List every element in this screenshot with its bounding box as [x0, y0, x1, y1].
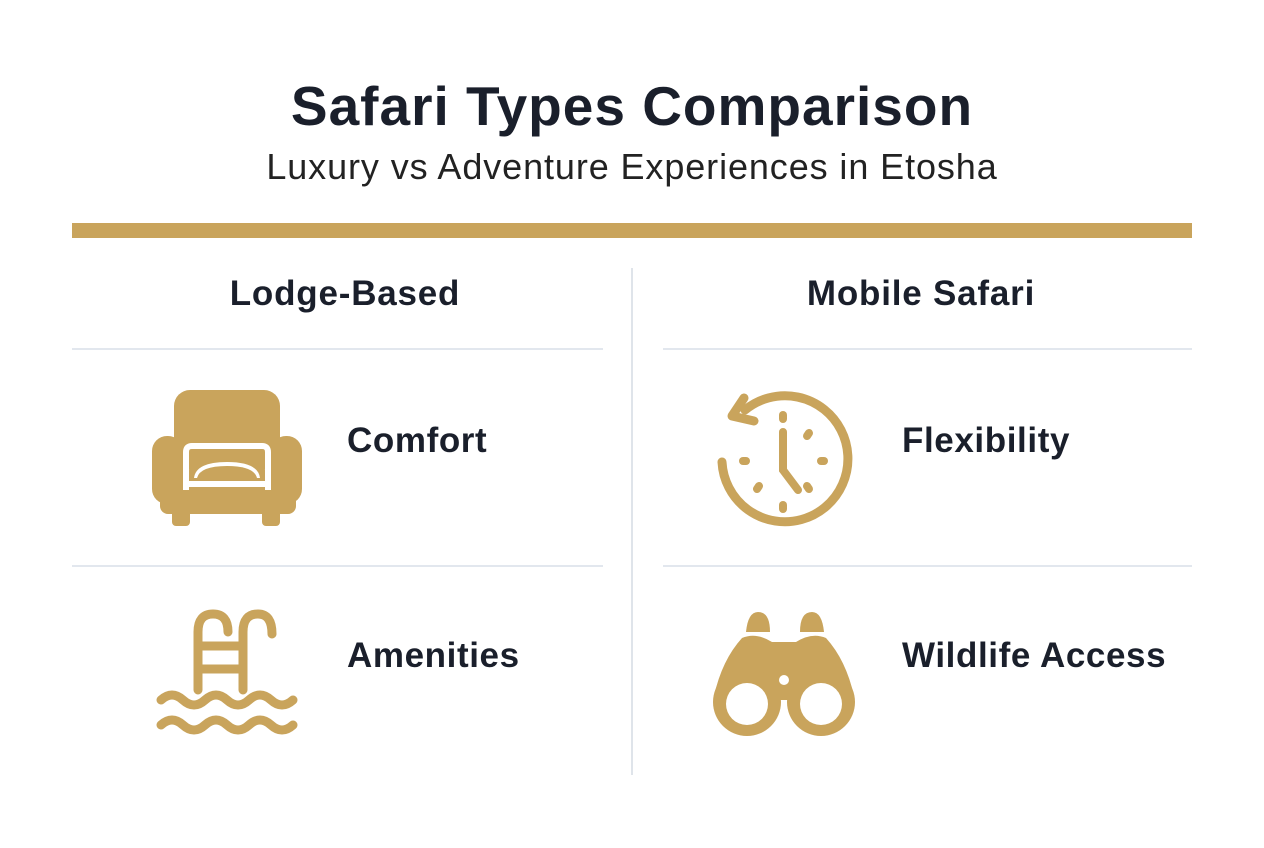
- label: Wildlife Access: Wildlife Access: [902, 636, 1166, 675]
- title: Safari Types Comparison: [291, 75, 973, 137]
- label: Amenities: Amenities: [347, 636, 520, 675]
- heading: Mobile Safari: Mobile Safari: [807, 274, 1035, 313]
- icon: binoculars: [713, 612, 855, 736]
- icon: pool: [156, 610, 298, 734]
- label: Flexibility: Flexibility: [902, 421, 1070, 460]
- icon: armchair: [152, 390, 302, 526]
- subtitle: Luxury vs Adventure Experiences in Etosha: [266, 146, 998, 187]
- label: Comfort: Comfort: [347, 421, 487, 460]
- gold bar: [72, 223, 1192, 238]
- icon: clock: [718, 391, 852, 526]
- heading: Lodge-Based: Lodge-Based: [230, 274, 460, 313]
